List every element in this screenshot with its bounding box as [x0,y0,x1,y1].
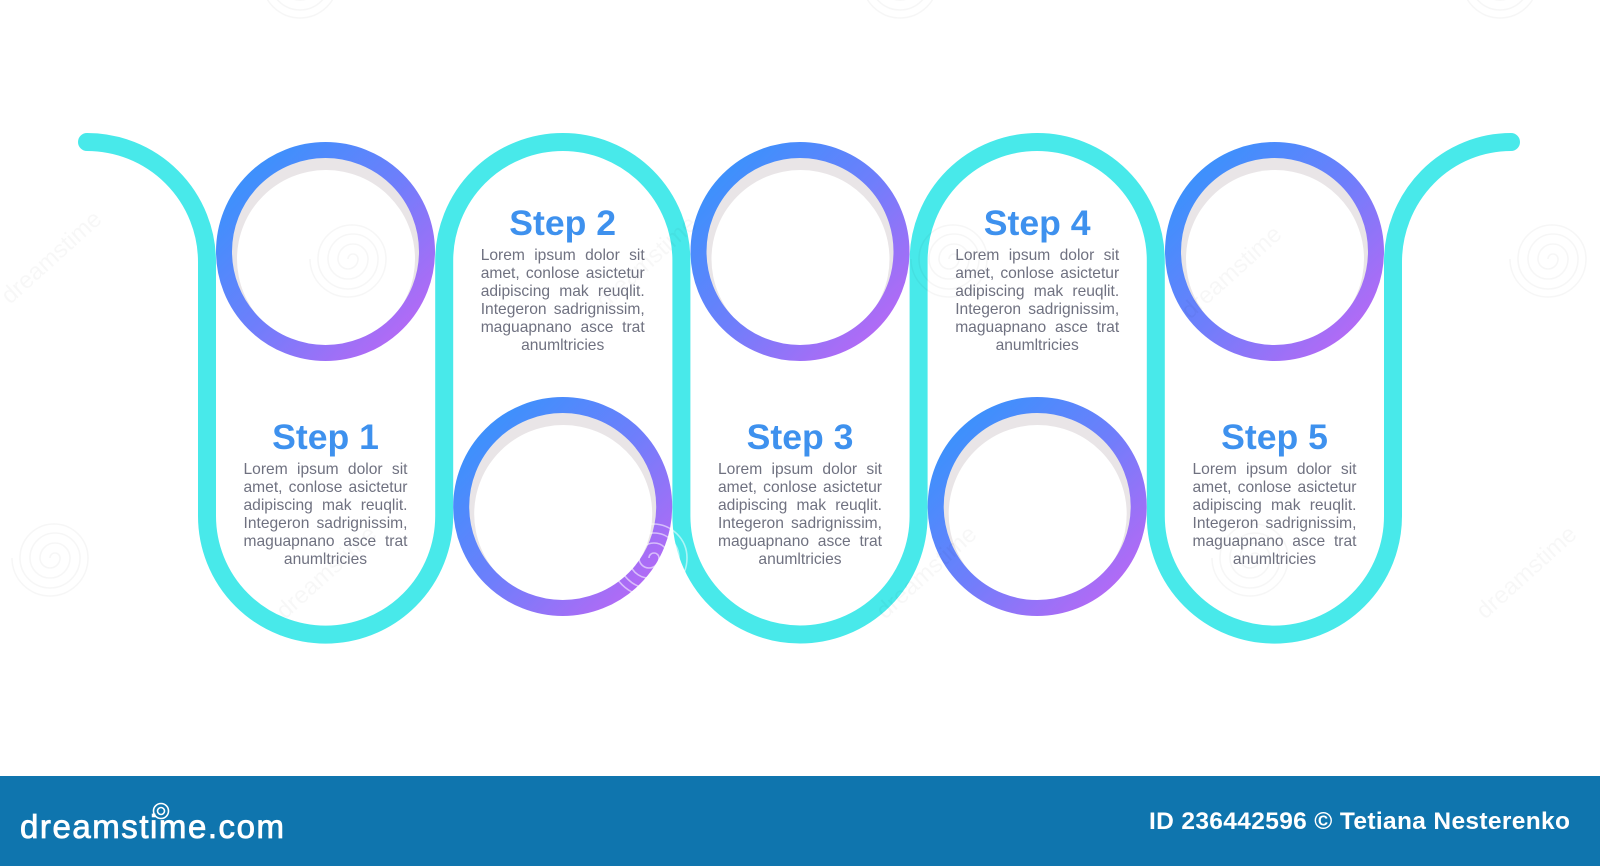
text block: step 4: adipiscing mak reuqlit. [955,283,1119,300]
text block: step 3: Lorem ipsum dolor sit [718,461,882,478]
watermark wordmarks: dreamstime [1176,221,1287,324]
text block: step 2: amet, conlose asictetur [481,265,645,282]
text block: step 3: Step 3 [747,417,853,457]
text block: step 3 [718,417,882,568]
footer logo: spiral [154,804,168,818]
text block: step 3: amet, conlose asictetur [718,479,882,496]
text block: step 5: Integeron sadrignissim, [1192,515,1356,532]
text block: step 5: amet, conlose asictetur [1192,479,1356,496]
text block: step 2: maguapnano asce trat [481,319,645,336]
text block: step 4 [955,203,1120,354]
text block: step 2: Lorem ipsum dolor sit [481,247,645,264]
text block: step 5 [1192,417,1356,568]
serpentine connector line [87,142,1511,635]
text block: step 5: anumltricies [1233,551,1316,568]
watermark wordmarks [0,206,1582,624]
text block: step 4: maguapnano asce trat [955,319,1119,336]
text block: step 4: anumltricies [996,337,1079,354]
ring: step 5 [1173,150,1376,353]
text block: step 5: Lorem ipsum dolor sit [1192,461,1356,478]
text block: step 2: Integeron sadrignissim, [481,301,645,318]
text block: step 2: anumltricies [521,337,604,354]
text block: step 1: adipiscing mak reuqlit. [244,497,408,514]
text block: step 1 [244,417,408,568]
watermark spirals [12,0,1586,596]
text block: step 5: adipiscing mak reuqlit. [1192,497,1356,514]
text block: step 1: Lorem ipsum dolor sit [244,461,408,478]
ring: step 2 [461,405,664,608]
text block: step 3: adipiscing mak reuqlit. [718,497,882,514]
text block: step 2: adipiscing mak reuqlit. [481,283,645,300]
text block: step 4: Integeron sadrignissim, [955,301,1119,318]
ring: step 1 [224,150,427,353]
text block: step 3: maguapnano asce trat [718,533,882,550]
text block: step 4: amet, conlose asictetur [955,265,1119,282]
watermark wordmarks: dreamstime [871,521,982,624]
text block: step 1: maguapnano asce trat [244,533,408,550]
ring: step 4 [936,405,1139,608]
watermark wordmarks: dreamstime [271,521,382,624]
text block: step 5: Step 5 [1221,417,1328,457]
text block: step 4: Step 4 [984,203,1091,243]
footer logo: wordmark: dreamstime.com [20,808,284,845]
footer credit: ID 236442596 © Tetiana Nesterenko [1149,808,1570,835]
footer bar [0,776,1600,866]
text block: step 2 [481,203,645,354]
text block: step 3: anumltricies [758,551,842,568]
watermark wordmarks: dreamstime [591,211,702,314]
text block: step 5: maguapnano asce trat [1192,533,1356,550]
text block: step 1: amet, conlose asictetur [244,479,408,496]
text block: step 4: Lorem ipsum dolor sit [955,247,1119,264]
ring: step 3 [698,150,902,353]
text block: step 2: Step 2 [509,203,616,243]
watermark wordmarks: dreamstime [1471,521,1582,624]
text block: step 1: Step 1 [272,417,379,457]
text block: step 3: Integeron sadrignissim, [718,515,882,532]
text block: step 1: anumltricies [284,551,367,568]
text block: step 1: Integeron sadrignissim, [244,515,408,532]
